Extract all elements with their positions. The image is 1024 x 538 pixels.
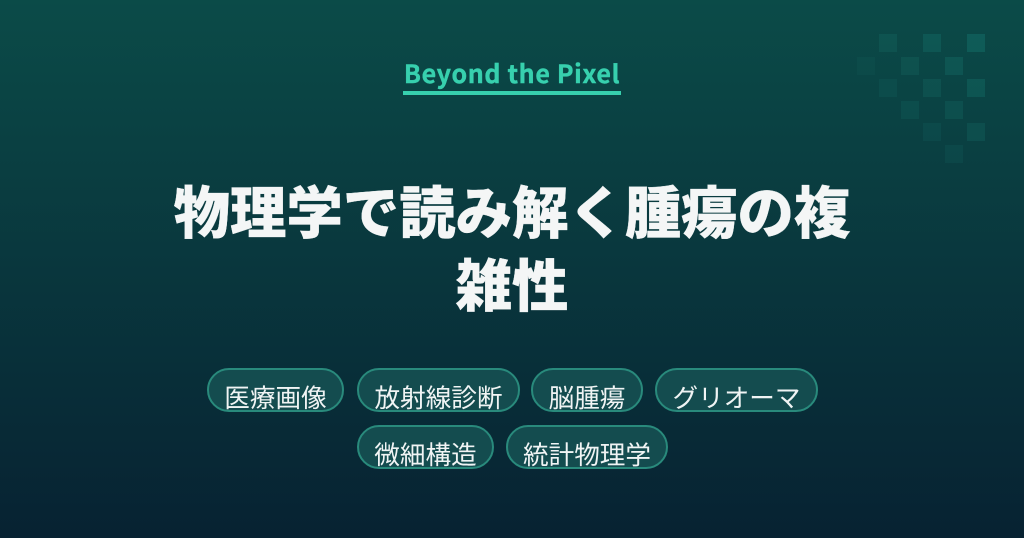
tag: 統計物理学 — [506, 425, 668, 469]
tag: 統計物理学: 統計物理学 — [523, 435, 651, 472]
tag: 脳腫瘍: 脳腫瘍 — [549, 378, 625, 415]
title: 物理学で読み解く腫瘍の複 — [174, 169, 850, 250]
tag: 医療画像 — [207, 368, 344, 412]
tag group — [207, 368, 818, 472]
eyebrow label: Beyond the Pixel: Beyond the Pixel — [404, 55, 620, 91]
tag: 微細構造: 微細構造 — [374, 435, 477, 472]
title: 雑性 — [456, 242, 568, 323]
tag: グリオーマ — [655, 368, 818, 412]
title — [174, 169, 850, 323]
tag: 微細構造 — [357, 425, 494, 469]
decorative pixel grid icon — [879, 34, 985, 141]
tag: 脳腫瘍 — [531, 368, 643, 412]
tag: 放射線診断: 放射線診断 — [374, 378, 502, 415]
tag: 放射線診断 — [357, 368, 520, 412]
tag: 医療画像: 医療画像 — [224, 378, 327, 415]
tag: グリオーマ: グリオーマ — [672, 378, 800, 415]
